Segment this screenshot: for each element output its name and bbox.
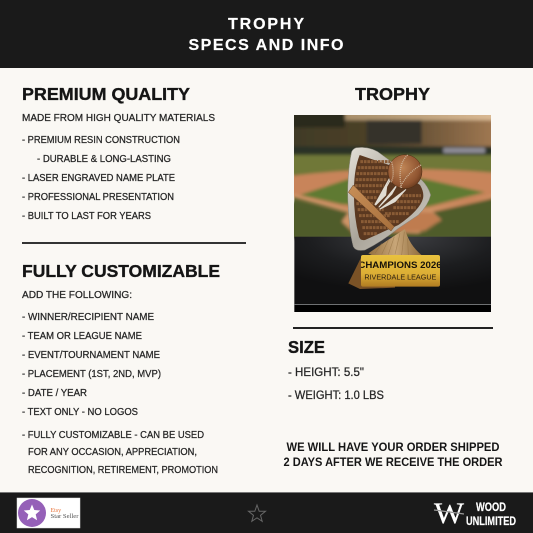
text: materials list: - BUILT TO LAST FOR YEARS <box>22 211 151 222</box>
trophy bronze panel <box>354 155 423 240</box>
panel: size <box>288 337 384 402</box>
trophy base <box>348 257 395 289</box>
text: customization list: - TEXT ONLY - NO LOGOS <box>22 407 138 418</box>
logo: wood unlimited: W <box>434 497 465 530</box>
trophy baseball <box>388 155 422 189</box>
panel: fully customizable <box>22 261 220 476</box>
trophy bat <box>348 185 394 231</box>
text: customization list: RECOGNITION, RETIREMENT, PROMOTION <box>28 465 218 476</box>
badge: Etsy star seller: Etsy <box>50 508 61 514</box>
text: materials list: - PROFESSIONAL PRESENTATION <box>22 192 174 203</box>
trophy name plate <box>358 255 442 287</box>
logo: wood unlimited: UNLIMITED <box>466 514 516 528</box>
text: materials list: - DURABLE & LONG-LASTING <box>37 154 171 165</box>
logo: wood unlimited: WOOD <box>476 500 506 514</box>
heading: fully customizable: FULLY CUSTOMIZABLE <box>22 261 220 281</box>
text: materials list: - LASER ENGRAVED NAME PLATE <box>22 173 175 184</box>
icon: center star <box>248 505 266 521</box>
text: customization list: ADD THE FOLLOWING: <box>22 290 132 301</box>
logo: wood unlimited <box>434 497 516 530</box>
title: SPECS AND INFO <box>188 37 344 54</box>
text: customization list: - EVENT/TOURNAMENT NAME <box>22 350 160 361</box>
trophy figure <box>348 147 442 289</box>
text: materials list: MADE FROM HIGH QUALITY MATERIALS <box>22 113 215 124</box>
trophy name plate: RIVERDALE LEAGUE <box>364 274 437 281</box>
trophy silver frame <box>348 147 431 250</box>
header band <box>0 0 533 68</box>
trophy stem <box>368 229 422 255</box>
text: dimensions: - HEIGHT: 5.5" <box>288 366 364 379</box>
text: dimensions <box>288 366 384 402</box>
icon: purple rosette <box>18 499 46 527</box>
trophy name plate: CHAMPIONS 2026 <box>358 260 442 270</box>
heading: premium quality: PREMIUM QUALITY <box>22 84 191 104</box>
footer band <box>0 492 533 533</box>
text: customization list: - PLACEMENT (1ST, 2ND, MVP) <box>22 369 161 380</box>
shipping note <box>284 442 503 469</box>
trophy ball trails <box>375 176 406 209</box>
trophy panel texture <box>355 162 421 234</box>
shipping note: 2 DAYS AFTER WE RECEIVE THE ORDER <box>284 457 503 469</box>
text: materials list: - PREMIUM RESIN CONSTRUCTION <box>22 135 180 146</box>
heading: size: SIZE <box>288 337 325 357</box>
shipping note: WE WILL HAVE YOUR ORDER SHIPPED <box>286 442 500 454</box>
panel: premium quality <box>22 84 215 222</box>
text: customization list: - DATE / YEAR <box>22 388 87 399</box>
text: customization list: - FULLY CUSTOMIZABLE - CAN BE USED <box>22 430 204 441</box>
text: customization list: - WINNER/RECIPIENT NAME <box>22 312 154 323</box>
text: customization list: - TEAM OR LEAGUE NAME <box>22 331 142 342</box>
title: TROPHY <box>228 16 304 33</box>
text: customization list: FOR ANY OCCASION, APPRECIATION, <box>28 447 197 458</box>
text: materials list <box>22 113 215 222</box>
photo backdrop: ballfield <box>294 115 491 312</box>
product photo: baseball trophy <box>294 115 491 312</box>
badge: Etsy star seller: Star Seller <box>50 514 78 520</box>
title <box>188 16 344 54</box>
badge: Etsy star seller <box>17 498 80 528</box>
heading: trophy: TROPHY <box>355 84 431 104</box>
text: dimensions: - WEIGHT: 1.0 LBS <box>288 389 384 402</box>
text: customization list <box>22 290 218 476</box>
